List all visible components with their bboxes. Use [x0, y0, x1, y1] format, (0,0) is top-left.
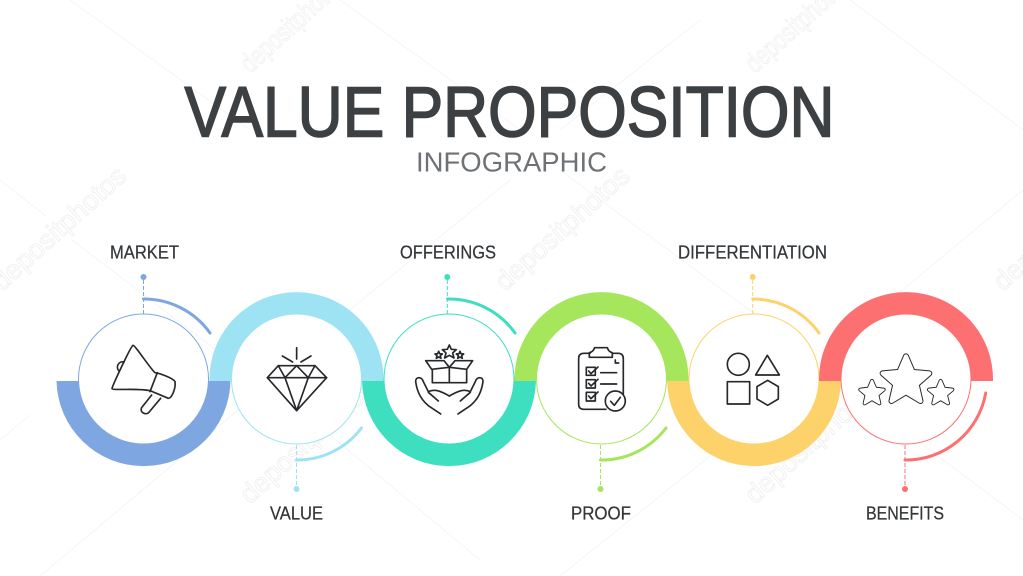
offerings label: OFFERINGS [400, 242, 496, 262]
panel: offerings [362, 242, 536, 466]
differentiation label: DIFFERENTIATION [678, 242, 827, 262]
panel: value [210, 292, 383, 524]
watermark text: depositphotos [234, 373, 380, 509]
watermark text: depositphotos [489, 160, 635, 296]
differentiation arc [753, 299, 819, 333]
offerings ring [362, 381, 536, 466]
benefits arc [905, 393, 986, 460]
value arc [296, 428, 362, 460]
market label: MARKET [110, 242, 179, 262]
benefits ring [819, 292, 993, 381]
icon: shapes [727, 353, 779, 405]
benefits circle [841, 314, 971, 444]
market circle [78, 314, 208, 444]
offerings arc [448, 299, 515, 333]
value circle [232, 314, 362, 444]
offerings circle [384, 314, 514, 444]
market ring [57, 381, 230, 466]
proof arc [600, 428, 666, 460]
icon: megaphone [112, 345, 175, 414]
watermark text: depositphotos [739, 373, 885, 509]
panel: benefits [819, 292, 993, 524]
panel: proof [514, 292, 688, 524]
proof connector [598, 445, 604, 492]
value connector [294, 445, 300, 492]
icon: box in hands [416, 345, 483, 414]
icon: diamond [267, 348, 327, 411]
offerings connector [444, 274, 450, 314]
proof circle [536, 314, 666, 444]
benefits label: BENEFITS [866, 504, 944, 524]
differentiation ring [667, 381, 841, 466]
differentiation circle [689, 314, 819, 444]
value ring [210, 292, 383, 381]
proof ring [514, 292, 688, 381]
title: VALUE PROPOSITION [184, 74, 834, 152]
value label: VALUE [270, 504, 323, 524]
market connector [140, 274, 146, 314]
benefits connector [902, 445, 908, 492]
panel: market [57, 242, 230, 466]
differentiation connector [750, 274, 756, 314]
proof label: PROOF [571, 504, 631, 524]
subtitle: INFOGRAPHIC [416, 146, 607, 178]
icon: clipboard [579, 348, 625, 411]
market arc [144, 299, 210, 333]
icon: three stars [860, 356, 952, 403]
panel: differentiation [667, 242, 841, 466]
